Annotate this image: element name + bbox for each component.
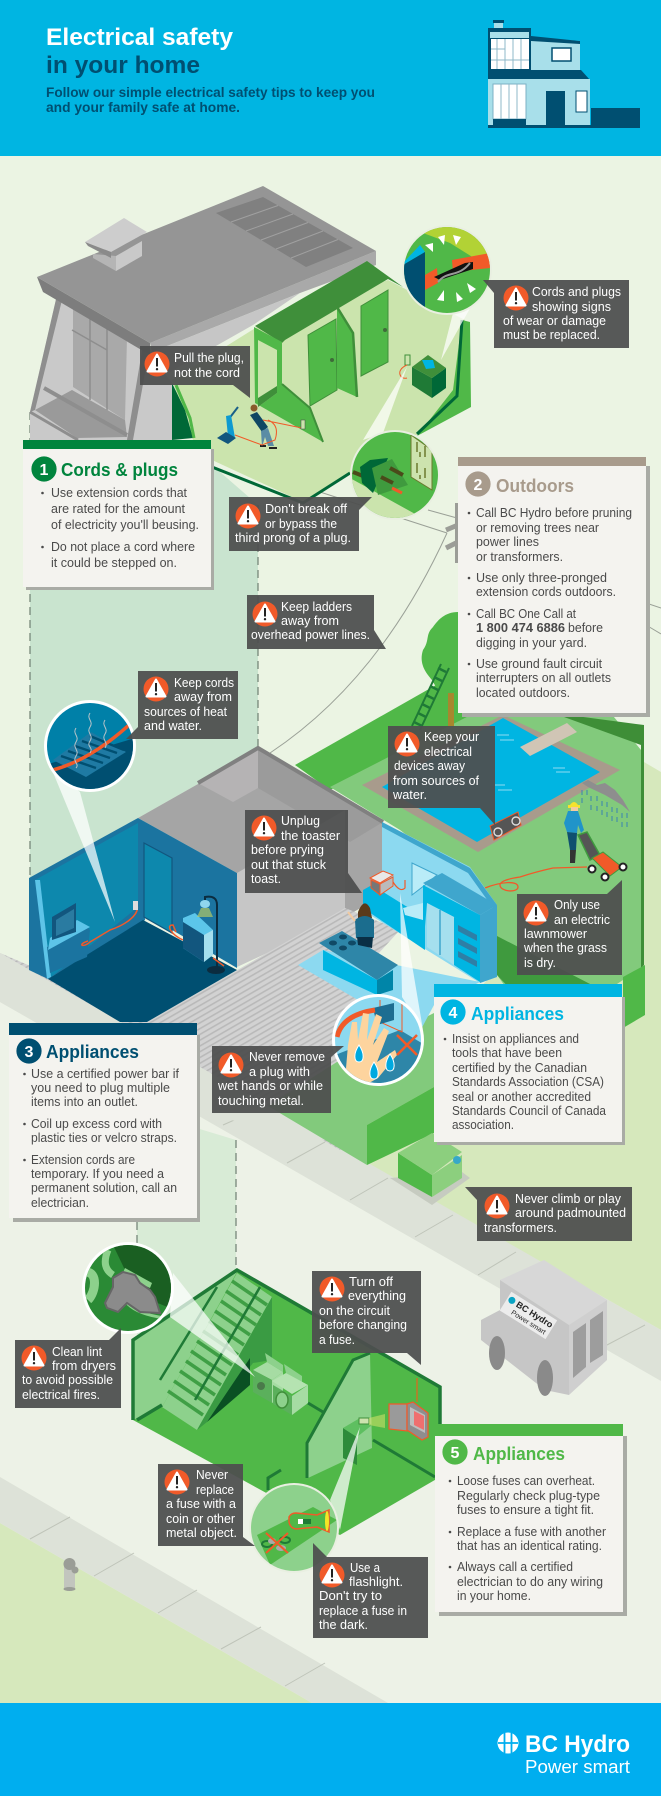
callout: coin or metal: replace xyxy=(196,1482,234,1497)
callout: coin or metal: metal object. xyxy=(166,1525,237,1540)
callout: use a flashlight xyxy=(313,1543,428,1638)
breaker panel xyxy=(389,1402,428,1440)
basement outline xyxy=(133,1270,440,1430)
outdoor yard xyxy=(295,612,645,1035)
bullets: Insist on appliances and xyxy=(452,1032,579,1046)
back fence xyxy=(295,660,520,790)
callout: turn off circuit: before changing xyxy=(319,1317,407,1332)
callout: cords and plugs replaced: Cords and plugs xyxy=(532,284,621,299)
heading xyxy=(31,456,178,482)
callout: toaster xyxy=(245,810,362,893)
door 2 xyxy=(361,290,388,376)
callout: turn off circuit xyxy=(312,1271,421,1365)
callout: dryer lint xyxy=(15,1328,121,1408)
truck xyxy=(481,1260,607,1396)
callout: ladders: away from xyxy=(281,613,339,628)
lawnmower xyxy=(578,832,626,880)
callout: wet hands: touching metal. xyxy=(218,1093,304,1108)
diving board xyxy=(520,723,577,756)
bullets: interrupters on all outlets xyxy=(476,671,611,685)
circle: dryer lint xyxy=(82,1242,175,1335)
counter xyxy=(363,885,425,950)
ground: lower lot xyxy=(0,1002,661,1703)
callout: pull the plug: Pull the plug, xyxy=(174,350,244,365)
callout: turn off circuit: Turn off xyxy=(349,1274,393,1289)
circle: frayed cord xyxy=(404,227,490,315)
callout: padmounted transformers: transformers. xyxy=(484,1220,557,1235)
ground: right lawn xyxy=(330,755,661,1330)
truck logo xyxy=(500,1292,557,1339)
bullets: Use a certified power bar if xyxy=(31,1067,180,1081)
heading xyxy=(16,1038,139,1064)
bullets: Extension cords are xyxy=(31,1153,135,1167)
kitchen wall xyxy=(362,822,497,983)
bullets: certified by the Canadian xyxy=(452,1061,587,1075)
sidewalk overlap xyxy=(0,953,330,1141)
callout: use a flashlight: replace a fuse in xyxy=(319,1603,407,1618)
BC Hydro logo: BC Hydro xyxy=(525,1731,630,1758)
callout: toaster: toast. xyxy=(251,871,281,886)
tree xyxy=(422,612,458,726)
boombox xyxy=(490,812,521,840)
callout: turn off circuit: on the circuit xyxy=(319,1303,390,1318)
callout: padmounted transformers xyxy=(465,1187,632,1241)
circle: plug xyxy=(350,430,438,520)
callout: cords and plugs replaced: of wear or damage xyxy=(503,313,606,328)
bullets: power lines xyxy=(476,535,539,549)
bullets: association. xyxy=(452,1118,514,1132)
callout: toaster: out that stuck xyxy=(251,857,326,872)
callout: wet hands: Never remove xyxy=(249,1049,325,1064)
heading: Cords & plugs xyxy=(61,459,178,480)
BC Hydro logo: Power smart xyxy=(525,1757,630,1777)
heading: Appliances xyxy=(473,1443,565,1464)
sidewalk upper xyxy=(0,953,661,1381)
bullets: you need to plug multiple xyxy=(31,1081,170,1095)
deck xyxy=(0,908,415,1150)
panel 3: appliances xyxy=(9,1023,200,1222)
cabinet xyxy=(343,1418,372,1465)
left wall xyxy=(29,818,145,979)
lawnmower man xyxy=(564,802,584,863)
callout: coin or metal: Never xyxy=(196,1467,229,1482)
circle: flashlight xyxy=(249,1483,340,1574)
bullets: seal or another accredited xyxy=(452,1090,591,1104)
power lines and pole xyxy=(270,492,661,753)
mint guide column upper xyxy=(30,412,258,880)
bullets xyxy=(449,1474,606,1603)
heading: Appliances xyxy=(471,1003,564,1024)
bullets xyxy=(23,1067,180,1210)
callout: dryer lint: to avoid possible xyxy=(22,1372,113,1387)
living room xyxy=(29,818,237,1022)
callout: use a flashlight: flashlight. xyxy=(349,1574,403,1589)
bullets: or removing trees near xyxy=(476,521,599,535)
bullets: located outdoors. xyxy=(476,686,570,700)
truck logo: Power smart xyxy=(510,1310,547,1336)
bullets xyxy=(444,1032,606,1132)
toaster cord xyxy=(393,880,405,890)
basement left wall xyxy=(133,1272,237,1420)
door 1 xyxy=(308,319,337,406)
bullets: it could be stepped on. xyxy=(51,556,177,570)
circle: heat and water xyxy=(44,700,136,795)
callout: dryer lint: Clean lint xyxy=(52,1344,102,1359)
bullets: Call BC One Call at xyxy=(476,607,576,621)
callout: electric lawnmower: lawnmower xyxy=(524,926,588,941)
callout: toaster: Unplug xyxy=(281,813,320,828)
callout: heat and water: Keep cords xyxy=(174,675,234,690)
heading xyxy=(442,1439,565,1465)
BC Hydro logo xyxy=(498,1731,630,1777)
small flashlight xyxy=(359,1418,369,1424)
hedge xyxy=(497,936,592,1010)
bullets: are rated for the amount xyxy=(51,502,186,516)
bullets: Standards Association (CSA) xyxy=(452,1075,604,1089)
panel 1: cords and plugs xyxy=(23,440,214,590)
callout: devices away from water xyxy=(388,726,495,825)
heading: Outdoors xyxy=(496,475,574,496)
floor xyxy=(48,920,237,1022)
bullets: before xyxy=(568,621,603,635)
callout: dryer lint: electrical fires. xyxy=(22,1387,100,1402)
panel 4: appliances xyxy=(434,984,625,1145)
back wall xyxy=(138,818,237,968)
fire hydrant xyxy=(64,1558,78,1591)
lawn xyxy=(330,700,641,1035)
callout: coin or metal: a fuse with a xyxy=(166,1496,237,1511)
subtitle xyxy=(46,85,375,115)
bullets: electrician. xyxy=(31,1196,89,1210)
washer xyxy=(253,1353,283,1403)
header band xyxy=(0,0,661,156)
house 2 roof and walls xyxy=(138,748,383,967)
bullets: Do not place a cord where xyxy=(51,540,195,554)
upper floor xyxy=(172,280,470,502)
roof underside xyxy=(150,251,376,352)
heading: 2 xyxy=(474,477,483,494)
stairs xyxy=(160,1273,272,1430)
callout: pull the plug: not the cord xyxy=(174,365,240,380)
circle: wet hand xyxy=(332,994,425,1090)
heading xyxy=(440,999,564,1025)
bullets: Replace a fuse with another xyxy=(457,1525,606,1539)
heading: Appliances xyxy=(46,1041,139,1062)
kitchen floor xyxy=(298,950,480,1035)
front fence xyxy=(623,965,645,1028)
right wall xyxy=(417,320,471,436)
bullets xyxy=(468,506,632,700)
beam glow xyxy=(369,1414,385,1428)
callout: devices away from water: from sources of xyxy=(393,773,479,788)
mower cord xyxy=(485,867,587,891)
bullets: or transformers. xyxy=(476,550,563,564)
breaker wires xyxy=(416,1378,418,1402)
icon: house xyxy=(488,20,640,128)
callout: ladders: overhead power lines. xyxy=(251,627,370,642)
toaster xyxy=(370,871,393,895)
mint guide column lower xyxy=(137,1110,236,1335)
callout: third prong: third prong of a plug. xyxy=(235,530,351,545)
outlet xyxy=(133,901,138,910)
cabinet and fridge xyxy=(423,873,497,915)
dryer xyxy=(272,1364,308,1415)
island xyxy=(319,931,398,995)
ground: street lawn xyxy=(0,1523,312,1703)
partition xyxy=(337,307,357,397)
bullets: extension cords outdoors. xyxy=(476,585,616,599)
step stub xyxy=(268,1470,281,1490)
bullets: items into an outlet. xyxy=(31,1095,138,1109)
callout: cords and plugs replaced xyxy=(483,280,629,348)
spotlight beams xyxy=(52,303,473,1530)
callout: turn off circuit: everything xyxy=(348,1288,406,1303)
bullets: Use only three-pronged xyxy=(476,571,607,585)
dresser green xyxy=(412,355,446,398)
callout: coin or metal: coin or other xyxy=(166,1511,236,1526)
bullets: Loose fuses can overheat. xyxy=(457,1474,595,1488)
panel 2: outdoors xyxy=(458,457,650,717)
bullets: of electricity you'll beusing. xyxy=(51,518,199,532)
base edge xyxy=(212,467,350,503)
callout: wet hands: wet hands or while xyxy=(217,1078,323,1093)
bullets: Use extension cords that xyxy=(51,486,188,500)
callout: toaster: before prying xyxy=(251,842,324,857)
subtitle: and your family safe at home. xyxy=(46,100,240,115)
callout: coin or metal xyxy=(158,1464,255,1546)
bullets: 1 800 474 6886 xyxy=(476,621,565,635)
green bedroom walls xyxy=(172,261,471,503)
callout: ladders: Keep ladders xyxy=(281,599,352,614)
cords xyxy=(82,905,224,966)
heading xyxy=(465,471,574,497)
partition wall xyxy=(307,1353,372,1478)
callout: electric lawnmower xyxy=(517,880,622,975)
callout: devices away from water: electrical xyxy=(424,744,472,759)
roof xyxy=(37,186,376,343)
title: Electrical safety xyxy=(46,24,234,51)
right fence xyxy=(553,713,644,968)
person pulling cord xyxy=(235,404,305,448)
callout: devices away from water: Keep your xyxy=(424,729,480,744)
left wall xyxy=(172,383,193,440)
basement floor xyxy=(133,1270,440,1535)
callout: third prong xyxy=(229,497,372,551)
callout: use a flashlight: Don't try to xyxy=(319,1588,382,1603)
bullets: electrician to do any wiring xyxy=(457,1575,603,1589)
callout: devices away from water: water. xyxy=(392,787,427,802)
bullets: Call BC Hydro before pruning xyxy=(476,506,632,520)
front lawn xyxy=(268,1013,434,1165)
lamp xyxy=(197,897,225,974)
callout: third prong: Don't break off xyxy=(265,501,347,516)
callout: devices away from water: devices away xyxy=(394,758,465,773)
ladder xyxy=(412,664,449,730)
callout: wet hands: a plug with xyxy=(249,1064,310,1079)
bullets: Always call a certified xyxy=(457,1560,573,1574)
heading: 4 xyxy=(449,1005,458,1022)
callout: padmounted transformers: around padmounted xyxy=(515,1205,626,1220)
bullets: in your home. xyxy=(457,1589,531,1603)
callout: turn off circuit: a fuse. xyxy=(319,1332,355,1347)
outlet with cord xyxy=(400,355,410,378)
footer band xyxy=(0,1703,661,1796)
bullets: fuses to ensure a tight fit. xyxy=(457,1503,594,1517)
callout: use a flashlight: Use a xyxy=(350,1560,381,1575)
bullets: digging in your yard. xyxy=(476,636,587,650)
heading: 5 xyxy=(451,1445,460,1462)
upper house xyxy=(30,295,172,440)
doorway wall xyxy=(254,327,323,442)
bullets xyxy=(41,486,199,570)
callout: ladders xyxy=(247,595,386,649)
rain cloud xyxy=(582,780,630,827)
callout: dryer lint: from dryers xyxy=(52,1358,116,1373)
basement xyxy=(133,1270,440,1535)
callout: heat and water: away from xyxy=(174,689,232,704)
pool xyxy=(362,715,620,852)
bullets: Regularly check plug-type xyxy=(457,1489,600,1503)
callout: cords and plugs replaced: must be replaced. xyxy=(503,327,600,342)
callout: wet hands xyxy=(212,1046,344,1113)
title xyxy=(46,24,234,79)
callout: electric lawnmower: Only use xyxy=(554,897,600,912)
callout: third prong: or bypass the xyxy=(265,516,337,531)
padmount transformer xyxy=(390,1133,470,1205)
woman xyxy=(348,903,374,948)
subtitle: Follow our simple electrical safety tips to keep you xyxy=(46,85,375,100)
bullets: Coil up excess cord with xyxy=(31,1117,162,1131)
house wall xyxy=(30,295,172,440)
vacuum xyxy=(217,407,238,444)
bullets: Standards Council of Canada xyxy=(452,1104,606,1118)
truck logo: BC Hydro xyxy=(514,1299,555,1330)
callout: heat and water: and water. xyxy=(144,718,202,733)
callout: heat and water: sources of heat xyxy=(144,704,227,719)
kitchen xyxy=(298,822,497,1035)
heading: 1 xyxy=(40,462,49,479)
callout: electric lawnmower: an electric xyxy=(554,912,610,927)
bedroom top edge xyxy=(255,261,403,343)
heading: 3 xyxy=(25,1044,34,1061)
window xyxy=(412,863,437,895)
bullets: tools that have been xyxy=(452,1046,562,1060)
desk and tv xyxy=(47,903,90,973)
bullets: Use ground fault circuit xyxy=(476,657,603,671)
callout: heat and water xyxy=(126,671,238,739)
callout: toaster: the toaster xyxy=(281,828,341,843)
callout: use a flashlight: the dark. xyxy=(319,1617,368,1632)
bullets: temporary. If you need a xyxy=(31,1167,164,1181)
bullets: plastic ties or velcro straps. xyxy=(31,1131,177,1145)
chimney xyxy=(85,218,147,271)
callout: padmounted transformers: Never climb or play xyxy=(515,1191,621,1206)
callout: cords and plugs replaced: showing signs xyxy=(532,299,611,314)
sidewalk lower xyxy=(0,1477,388,1703)
solar panels xyxy=(216,197,353,267)
callout: electric lawnmower: when the grass xyxy=(523,940,607,955)
callout: electric lawnmower: is dry. xyxy=(524,955,556,970)
door xyxy=(144,843,172,933)
title: in your home xyxy=(46,52,200,79)
bullets: that has an identical rating. xyxy=(457,1539,602,1553)
callout: pull the plug xyxy=(140,346,250,398)
bullets: permanent solution, call an xyxy=(31,1181,177,1195)
dresser xyxy=(183,913,213,962)
panel 5: appliances xyxy=(435,1424,627,1616)
